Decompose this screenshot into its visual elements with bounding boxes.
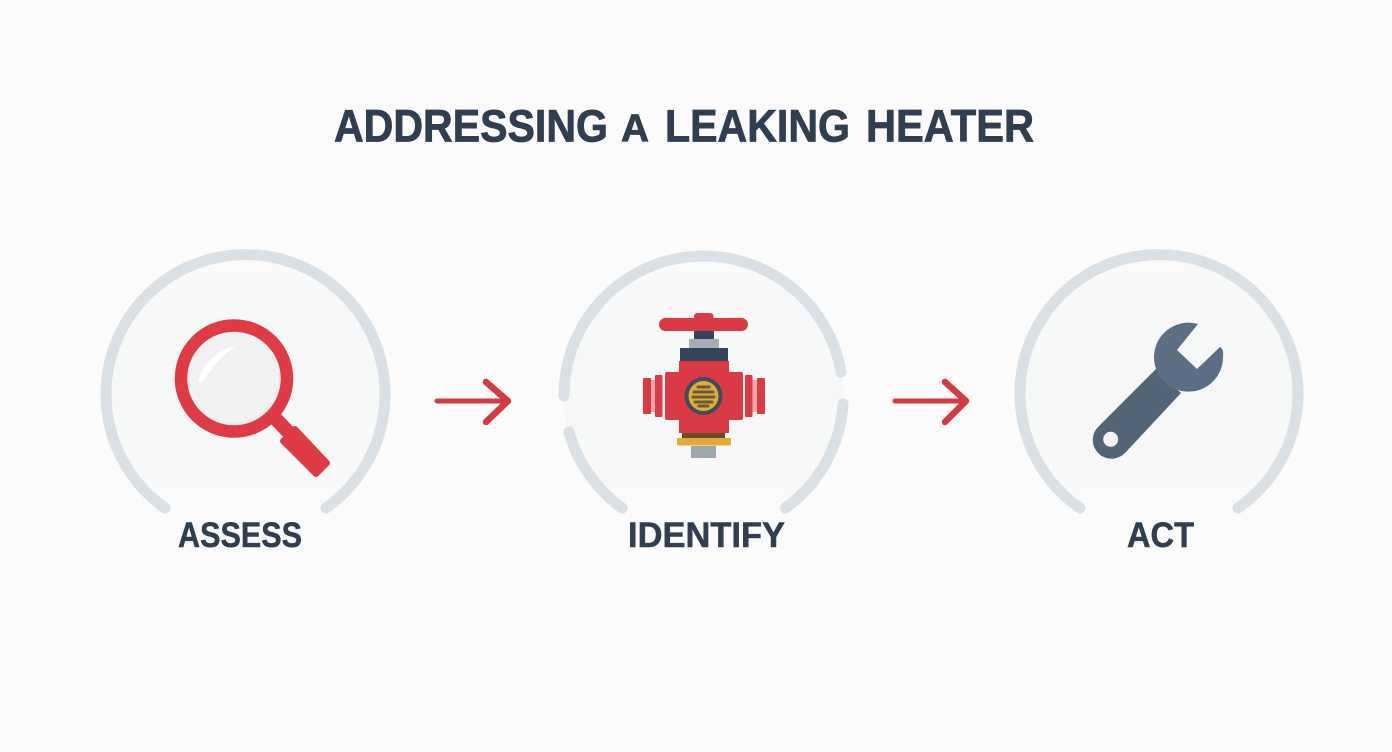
icon: wrench (1093, 323, 1223, 459)
label: act: ACT (1127, 516, 1194, 555)
step 1: assess (106, 255, 385, 555)
ring arc: act (1020, 255, 1298, 508)
title: LEAKING (665, 100, 850, 152)
arrow: identify to act (895, 382, 966, 422)
label: identify: IDENTIFY (628, 516, 785, 555)
title (334, 100, 1034, 152)
title: HEATER (866, 100, 1034, 152)
label: assess: ASSESS (178, 516, 302, 555)
title: ADDRESSING (334, 100, 608, 152)
circle background: assess (110, 260, 380, 530)
circle background: act (1024, 260, 1294, 530)
step 2: identify (564, 255, 844, 555)
arrow: assess to identify (437, 382, 508, 422)
ring arcs: identify (564, 256, 843, 508)
icon: valve (643, 313, 765, 458)
title: A (621, 108, 649, 150)
step 3: act (1020, 255, 1298, 555)
circle background: identify (564, 255, 844, 535)
icon: magnifying glass (181, 326, 327, 474)
ring arc: assess (106, 255, 385, 508)
